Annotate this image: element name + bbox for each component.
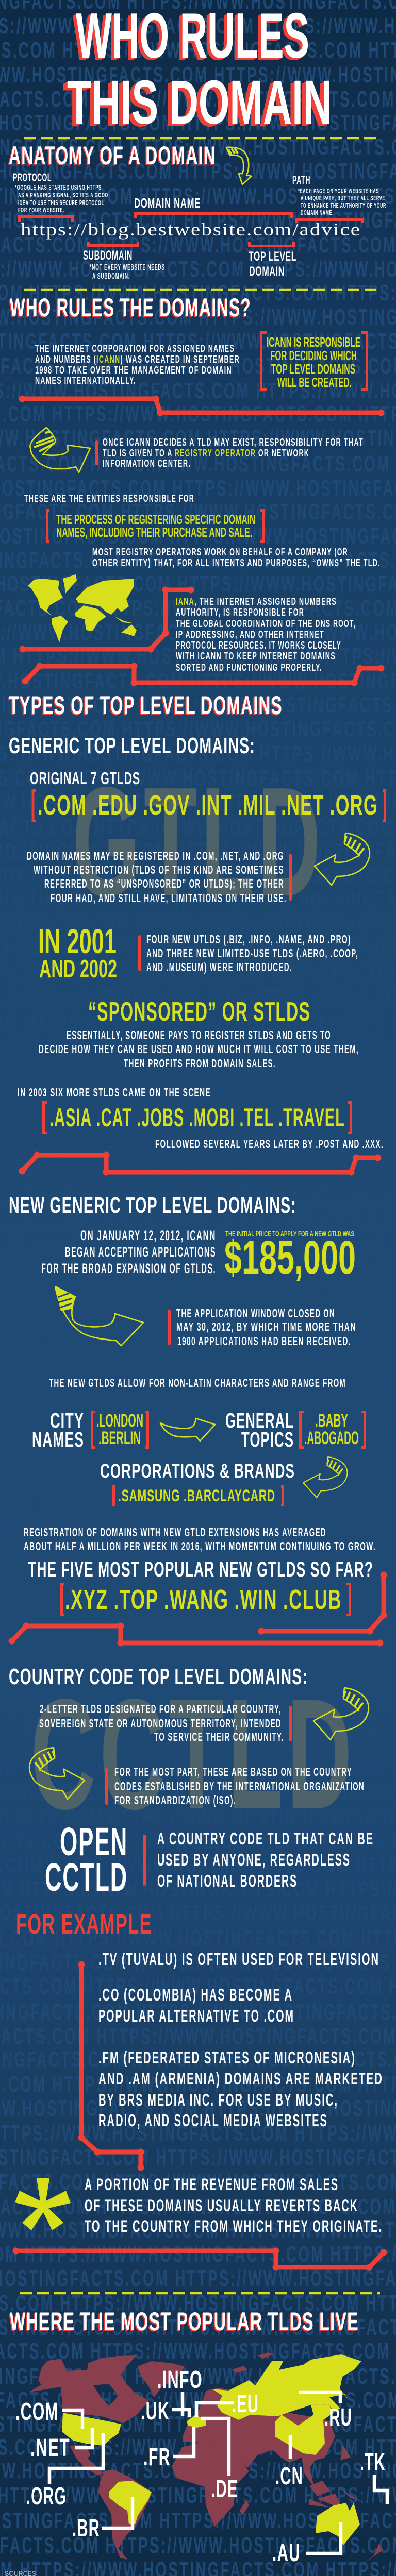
label: .br: .BR <box>72 2515 100 2542</box>
text: domain names registration <box>27 849 287 905</box>
text: ISO country codes <box>114 1765 365 1807</box>
label: .eu: .EU <box>232 2391 259 2418</box>
label: .tk <box>360 2449 387 2504</box>
bracket: protocol <box>20 216 72 222</box>
callout: registering process: THE PROCESS OF REGISTERING SPECIFIC DOMAIN <box>56 512 255 527</box>
section: new generic top level domains <box>9 1193 384 1643</box>
label: .info <box>157 2366 203 2416</box>
heading: anatomy of a domain <box>8 141 216 171</box>
group: city names: .BERLIN <box>98 1428 141 1448</box>
text: registry operator: INFORMATION CENTER. <box>103 458 191 469</box>
callout: open ccTLD: CCTLD <box>45 1855 128 1900</box>
group: general topics: .BABY <box>315 1411 348 1431</box>
text: january 2012 <box>41 1228 216 1276</box>
connector line <box>261 1575 384 1631</box>
label: .cn: .CN <box>275 2463 303 2490</box>
connector line <box>81 1964 141 2167</box>
label: original 7 gTLDs: ORIGINAL 7 GTLDS <box>30 769 140 788</box>
text: examples <box>98 1950 383 2130</box>
label: subdomain: A SUBDOMAIN. <box>92 272 130 281</box>
text: january 2012: ON JANUARY 12, 2012, ICANN <box>80 1228 216 1243</box>
text: in 2003: IN 2003 SIX MORE STLDS CAME ON THE SCENE <box>18 1086 211 1099</box>
heading: who rules the domains: WHO RULES THE DOMAINS? <box>9 294 250 323</box>
callout: ICANN responsibility <box>261 333 367 390</box>
label: protocol <box>13 171 108 214</box>
red divider <box>168 1311 171 1344</box>
group: city names: NAMES <box>32 1428 84 1451</box>
label: path <box>292 174 386 216</box>
callout: registering process: NAMES, INCLUDING THEIR PURCHASE AND SALE. <box>56 524 252 540</box>
text: IANA <box>176 596 356 673</box>
text: registry operator: TLD IS GIVEN TO A REGISTRY OPERATOR OR NETWORK <box>103 448 309 459</box>
label: .au <box>272 2522 341 2567</box>
connector line <box>23 590 191 649</box>
label: .net: .NET <box>30 2434 70 2462</box>
label: subdomain: SUBDOMAIN <box>83 248 133 263</box>
connector line <box>22 1155 378 1172</box>
text: ICANN intro: 1998 TO TAKE OVER THE MANAGEMENT OF DOMAIN <box>35 365 232 376</box>
text: ICANN intro: NAMES INTERNATIONALLY. <box>35 375 136 386</box>
label: subdomain <box>83 248 165 281</box>
label: protocol: AS A RANKING SIGNAL, SO IT'S A GOOD <box>18 191 108 199</box>
label: path: PATH <box>292 174 310 187</box>
group: general topics <box>225 1409 365 1451</box>
label: path: DOMAIN NAME. <box>301 209 334 216</box>
text: application window <box>176 1307 356 1348</box>
label: subdomain: *NOT EVERY WEBSITE NEEDS <box>90 263 165 272</box>
callout: registering process <box>47 510 263 542</box>
heading: who rules the domains: WHO RULES THE DOMAINS? <box>10 293 251 322</box>
callout: in 2001 and 2002 <box>38 922 117 983</box>
label: protocol: *GOOGLE HAS STARTED USING HTTPS <box>15 183 102 191</box>
group: city names: .LONDON <box>96 1411 143 1431</box>
label: domain name: DOMAIN NAME <box>134 195 201 211</box>
map: world with highlighted countries <box>29 2352 383 2563</box>
text: new uTLDs: AND .MUSEUM) WERE INTRODUCED. <box>146 960 292 974</box>
text: registry operators <box>92 547 381 569</box>
heading: for example: FOR EXAMPLE <box>16 1909 152 1940</box>
text: january 2012: FOR THE BROAD EXPANSION OF GTLDS. <box>41 1261 216 1276</box>
connector line <box>12 1626 380 1643</box>
icon: curved arrow left <box>314 1688 369 1740</box>
group: corporations and brands: .SAMSUNG .BARCLAYCARD <box>118 1486 275 1505</box>
callout: in 2001 and 2002: IN 2001 <box>38 922 117 961</box>
group: general topics: GENERAL <box>225 1409 294 1432</box>
red divider <box>105 1770 108 1803</box>
text: ICANN intro <box>35 343 240 386</box>
label: .com: .COM <box>15 2398 59 2426</box>
text: entities responsible: THESE ARE THE ENTITIES RESPONSIBLE FOR <box>24 493 194 504</box>
icon: curved arrow left <box>303 1457 347 1498</box>
label: .cn <box>275 2435 303 2490</box>
label: protocol: PROTOCOL <box>13 171 52 184</box>
group: city names <box>32 1409 147 1451</box>
icon: arrow right <box>160 1418 215 1441</box>
label: protocol: FOR YOUR WEBSITE. <box>18 206 64 214</box>
text: sponsored explanation: THEN PROFITS FROM DOMAIN SALES. <box>124 1057 276 1070</box>
label: top level domain <box>249 249 296 279</box>
text: sponsored explanation <box>39 1028 359 1070</box>
icon: curved arrow right <box>30 428 90 472</box>
callout: in 2001 and 2002: AND 2002 <box>39 955 117 983</box>
icon: curved arrow right <box>55 1286 143 1346</box>
label: .br <box>72 2497 133 2542</box>
text: ISO country codes: FOR STANDARDIZATION (ISO). <box>114 1793 236 1807</box>
label: .info: .INFO <box>157 2366 203 2394</box>
callout: open ccTLD <box>45 1820 128 1900</box>
text: revenue note <box>85 2175 383 2235</box>
label: .de: .DE <box>211 2476 238 2503</box>
bracket: top level domain <box>250 242 294 246</box>
label: .fr <box>143 2427 194 2471</box>
text: IANA: AUTHORITY, IS RESPONSIBLE FOR <box>176 607 304 618</box>
label: .ru <box>299 2392 352 2431</box>
text: ICANN intro: THE INTERNET CORPORATION FOR ASSIGNED NAMES <box>35 343 235 354</box>
callout: open ccTLD: OPEN <box>60 1820 128 1864</box>
heading: who rules the domains <box>9 293 251 323</box>
label: top level domain: TOP LEVEL <box>249 249 296 264</box>
group: general topics: TOPICS <box>241 1428 294 1451</box>
text: registration averages <box>24 1526 376 1553</box>
text: 2-letter TLDs: TO SERVICE THEIR COMMUNITY. <box>154 1730 284 1743</box>
text: january 2012: BEGAN ACCEPTING APPLICATIONS <box>65 1244 216 1260</box>
connector line <box>16 2251 384 2267</box>
red divider <box>95 442 98 464</box>
icon: curved arrow left <box>315 833 370 885</box>
text: 2-letter TLDs <box>39 1702 284 1743</box>
connector line <box>25 666 381 683</box>
text: new uTLDs <box>146 933 358 974</box>
icon: curved arrow right <box>29 1748 85 1799</box>
label: protocol: IDEA TO USE THIS SECURE PROTOCOL <box>18 199 104 207</box>
label: .org: .ORG <box>26 2483 67 2510</box>
subheading: generic top level domains: GENERIC TOP LEVEL DOMAINS: <box>9 733 255 758</box>
section: where the most popular TLDs live <box>9 2307 387 2567</box>
red divider <box>138 937 141 970</box>
label: .fr: .FR <box>143 2444 171 2471</box>
section: anatomy of a domain <box>8 141 386 281</box>
heading: anatomy of a domain: ANATOMY OF A DOMAIN <box>8 142 215 171</box>
label: .uk: .UK <box>141 2398 170 2425</box>
icon: asterisk <box>15 2178 71 2230</box>
section: who rules the domains <box>9 293 381 683</box>
url example: https://blog.bestwebsite.com/advice <box>21 219 361 240</box>
icon: arrow pointing down <box>226 147 252 184</box>
text: ICANN intro: AND NUMBERS (ICANN) WAS CREATED IN SEPTEMBER <box>35 354 240 365</box>
bracket: subdomain <box>89 242 138 245</box>
label: .org <box>26 2433 103 2510</box>
group: corporations and brands: CORPORATIONS & BRANDS <box>100 1460 295 1482</box>
heading: types of top level domains <box>8 691 283 721</box>
bracket: domain name <box>135 213 292 218</box>
text: open ccTLD definition <box>157 1829 374 1891</box>
icon: world map <box>28 574 137 642</box>
label: .eu <box>196 2391 259 2418</box>
connector line <box>22 399 381 413</box>
label: top level domain: DOMAIN <box>249 264 285 279</box>
label: .au: .AU <box>272 2539 301 2567</box>
heading: anatomy of a domain: ANATOMY OF A DOMAIN <box>9 141 216 170</box>
group: city names: CITY <box>50 1409 84 1432</box>
section: country code top level domains <box>9 1664 384 2267</box>
label: .de <box>201 2418 238 2503</box>
section: types of top level domains <box>8 691 385 1172</box>
label: .ru: .RU <box>324 2404 352 2431</box>
bracket: path <box>297 219 362 223</box>
red divider <box>143 1836 146 1884</box>
title <box>63 1 332 140</box>
text: open ccTLD definition: OF NATIONAL BORDERS <box>157 1872 298 1891</box>
red divider <box>289 855 292 899</box>
group: corporations and brands <box>100 1460 295 1505</box>
text: registry operator <box>103 437 364 469</box>
red divider <box>289 1707 292 1740</box>
